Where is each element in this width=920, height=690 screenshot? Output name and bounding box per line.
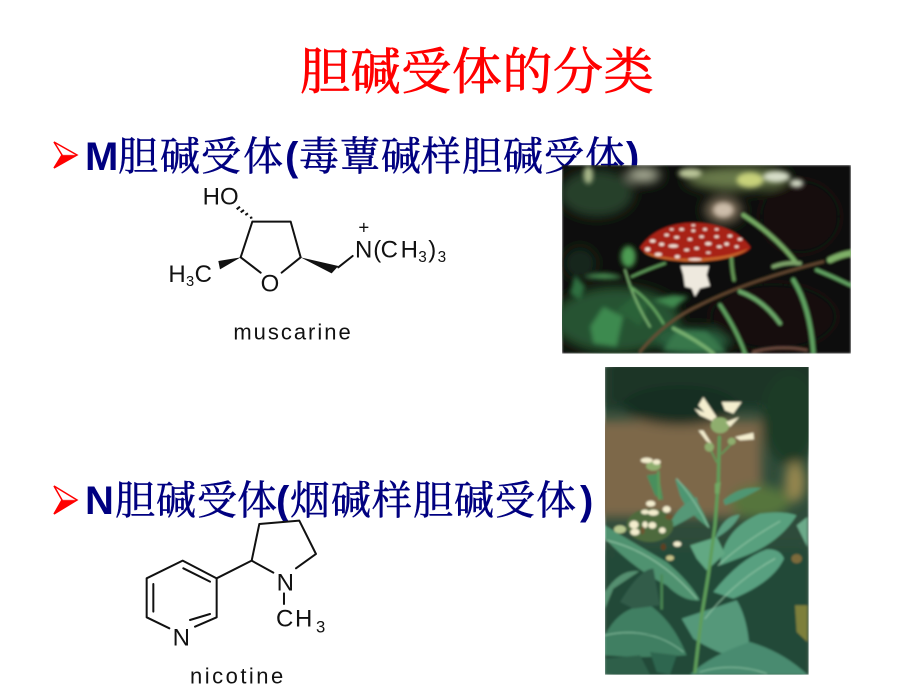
- name label: muscarine: [233, 319, 353, 344]
- wedge bonds: [218, 257, 338, 273]
- heading: M receptor: ): [626, 135, 639, 179]
- heading: M receptor: (: [285, 135, 299, 179]
- atom labels: 3: [418, 249, 427, 266]
- atom labels: 3: [438, 249, 446, 266]
- heading: N receptor: ): [580, 479, 593, 523]
- atom labels: ): [428, 236, 436, 263]
- heading: N receptor: 烟碱样胆碱受体: [290, 478, 576, 523]
- atom labels: CH: [276, 606, 314, 633]
- icon: bullet arrow N: [54, 486, 77, 514]
- mushroom cap: [640, 223, 751, 262]
- heading: M receptor: M: [85, 135, 118, 179]
- atom labels: N: [355, 236, 372, 263]
- atom labels: C: [195, 261, 212, 288]
- atom labels: N: [277, 570, 294, 597]
- photo: tobacco plant: [605, 367, 809, 675]
- atom labels: H: [168, 261, 186, 288]
- icon: bullet arrow M: [54, 142, 77, 168]
- name label: nicotine: [190, 663, 286, 688]
- chemical structure: nicotine: [147, 521, 325, 688]
- heading: N receptor: [54, 478, 593, 523]
- mushroom stem: [681, 266, 710, 297]
- atom labels: N: [173, 625, 190, 652]
- atom labels: O: [261, 270, 279, 297]
- atom labels: 3: [186, 274, 194, 290]
- chemical structure: muscarine: [168, 183, 446, 344]
- heading: N receptor: 胆碱受体: [115, 478, 277, 523]
- photo: fly agaric mushroom: [553, 165, 851, 355]
- atom labels: HO: [203, 183, 239, 210]
- atom labels: +: [358, 216, 369, 237]
- heading: M receptor: 毒蕈碱样胆碱受体: [299, 134, 625, 179]
- heading: N receptor: N: [85, 479, 114, 523]
- atom labels: (: [373, 236, 381, 263]
- heading: N receptor: (: [276, 479, 290, 523]
- atom labels: C: [381, 236, 398, 263]
- heading: M receptor: 胆碱受体: [118, 134, 283, 179]
- title: 胆碱受体的分类: [300, 44, 654, 100]
- atom labels: 3: [316, 618, 325, 637]
- heading: M receptor: [54, 134, 639, 179]
- atom labels: H: [401, 236, 418, 263]
